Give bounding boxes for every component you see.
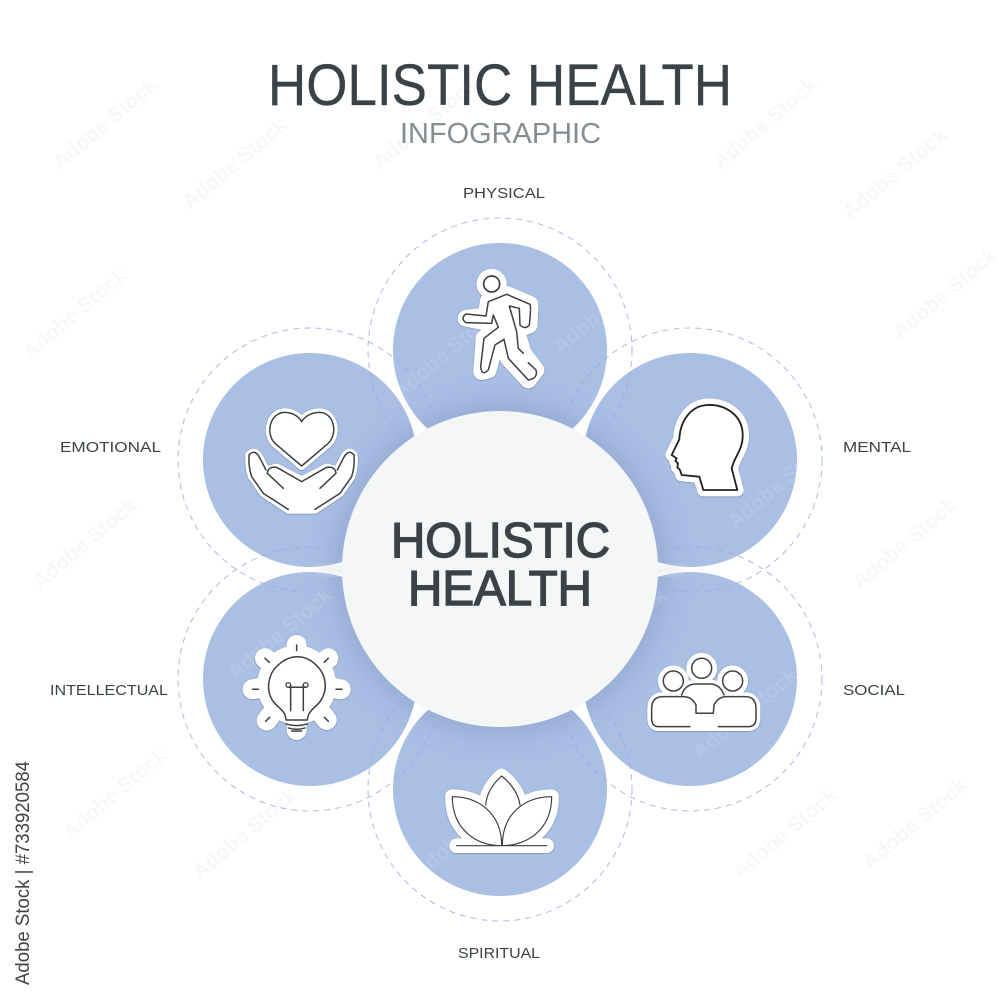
watermark xyxy=(18,74,1000,884)
watermark: Adobe Stock xyxy=(838,124,952,224)
watermark: Adobe Stock xyxy=(728,784,842,884)
icon: people group xyxy=(652,653,756,727)
dashed outer rings xyxy=(178,218,822,921)
watermark: Adobe Stock xyxy=(28,494,142,594)
label: mental: MENTAL xyxy=(843,439,911,456)
center text: HOLISTIC xyxy=(391,514,610,568)
watermark on petals: Adobe Stock xyxy=(558,584,672,684)
stock id: Adobe Stock | #733920584 xyxy=(13,761,34,985)
watermark on petals: Adobe Stock xyxy=(388,304,502,404)
watermark: Adobe Stock xyxy=(58,744,172,844)
center text xyxy=(391,514,610,616)
watermark: Adobe Stock xyxy=(848,494,962,594)
watermark: Adobe Stock xyxy=(178,114,292,214)
watermark: Adobe Stock xyxy=(708,74,822,174)
watermark on petals: Adobe Stock xyxy=(408,784,522,884)
watermark on petals: Adobe Stock xyxy=(688,664,802,764)
label: intellectual: INTELLECTUAL xyxy=(50,682,168,699)
label: emotional: EMOTIONAL xyxy=(60,439,161,456)
label: spiritual: SPIRITUAL xyxy=(458,945,540,962)
watermark: Adobe Stock xyxy=(858,774,972,874)
icon: lotus xyxy=(452,776,552,846)
watermark: Adobe Stock xyxy=(368,74,482,174)
watermark: Adobe Stock xyxy=(888,244,1000,344)
icon: light bulb xyxy=(253,645,342,731)
label: social: SOCIAL xyxy=(843,682,905,699)
icon: head xyxy=(672,405,743,490)
watermark: Adobe Stock xyxy=(48,74,162,174)
watermark: Adobe Stock xyxy=(188,784,302,884)
watermark on petals xyxy=(230,308,797,868)
watermark: Adobe Stock xyxy=(18,264,132,364)
center circle shadow on petals xyxy=(337,406,663,732)
soft grey wisps between petals xyxy=(316,567,684,573)
icon: runner xyxy=(463,269,536,380)
subtitle: INFOGRAPHIC xyxy=(400,118,601,150)
watermark on petals: Adobe Stock xyxy=(723,434,837,534)
center text: HEALTH xyxy=(408,562,592,616)
center circle xyxy=(342,411,658,727)
icon: heart in hands xyxy=(249,412,354,510)
petal circles xyxy=(203,243,797,896)
watermark on petals: Adobe Stock xyxy=(223,584,337,684)
label: physical: PHYSICAL xyxy=(463,185,545,202)
watermark on petals: Adobe Stock xyxy=(548,259,662,359)
watermark on petals: Adobe Stock xyxy=(218,274,332,374)
title: HOLISTIC HEALTH xyxy=(268,53,732,118)
